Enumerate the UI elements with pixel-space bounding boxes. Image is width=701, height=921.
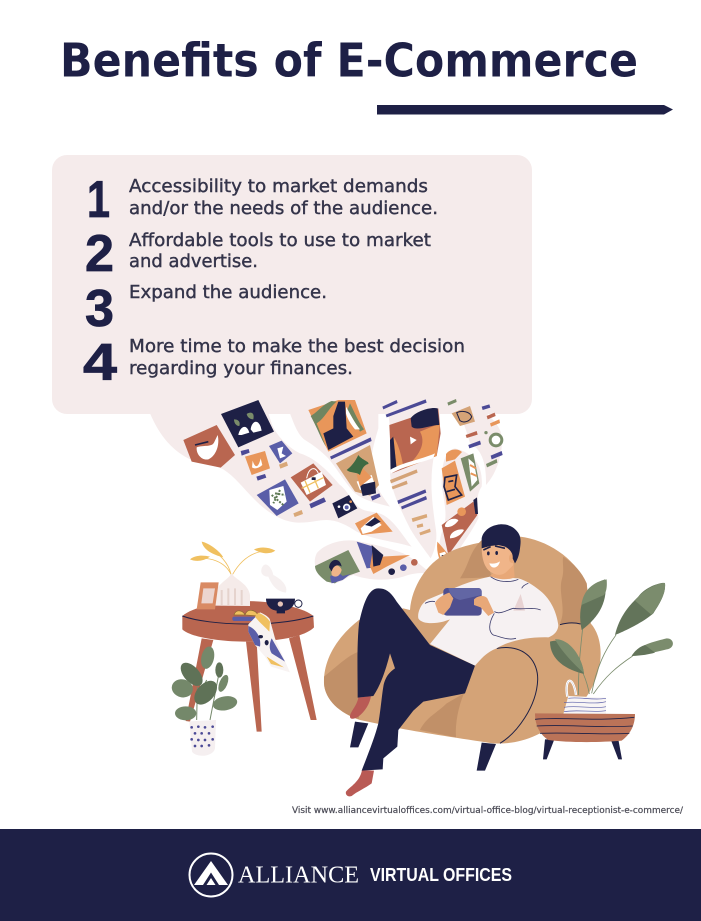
benefit 2: 2 (85, 225, 114, 283)
picture frame (197, 582, 219, 609)
logo tagline: VIRTUAL OFFICES (370, 865, 512, 885)
side table (182, 601, 317, 732)
armchair (324, 537, 601, 771)
coffee cup with steam (261, 565, 302, 613)
logo icon (190, 854, 232, 896)
benefit 4: More time to make the best decision (129, 337, 465, 357)
plate of snacks (232, 610, 261, 621)
face details (483, 546, 505, 550)
bubble: video stream (382, 399, 441, 558)
benefit 2 (85, 225, 431, 283)
benefit 4: 4 (83, 334, 117, 392)
footer band (0, 829, 701, 921)
illustration: man on armchair with side table and plants (170, 524, 673, 796)
benefit 1: 1 (87, 171, 110, 229)
hair (482, 524, 521, 563)
benefit 3: Expand the audience. (129, 283, 327, 303)
neck and head (490, 560, 515, 579)
vase with yellow leaves (190, 542, 275, 606)
right plant (550, 579, 673, 695)
trousers (357, 588, 475, 771)
woven basket (563, 681, 606, 714)
benefit 1: and/or the needs of the audience. (129, 199, 438, 219)
hands (435, 593, 494, 616)
tablet (443, 588, 482, 616)
benefit 3: 3 (85, 280, 114, 338)
ear (509, 554, 515, 563)
benefit 2: and advertise. (129, 252, 258, 272)
man (346, 524, 558, 796)
benefit 1: Accessibility to market demands (129, 177, 428, 197)
bubble: pattern stream (437, 399, 503, 572)
illustration: thought bubbles of online shopping (150, 399, 503, 583)
stool (535, 713, 635, 759)
bubble: fashion stream (290, 400, 390, 507)
benefit 4 (83, 334, 465, 392)
logo wordmark: ALLIANCE (238, 862, 359, 888)
benefit 2: Affordable tools to use to market (129, 231, 431, 251)
bubble: people stream (315, 540, 433, 583)
sweater (418, 577, 558, 666)
benefit 4: regarding your finances. (129, 359, 353, 379)
benefit 3 (85, 280, 327, 338)
title underline arrow (377, 105, 673, 114)
source link: Visit www.alliancevirtualoffices.com/virtual-office-blog/virtual-receptionist-e-commerce/ (292, 806, 683, 816)
panel: benefits list (52, 155, 532, 414)
benefit 1 (87, 171, 438, 229)
title: Benefits of E-Commerce (60, 34, 638, 88)
napkin (248, 612, 290, 672)
potted plant (170, 645, 238, 756)
bubble: left product stream (150, 400, 412, 547)
socks (346, 696, 374, 796)
